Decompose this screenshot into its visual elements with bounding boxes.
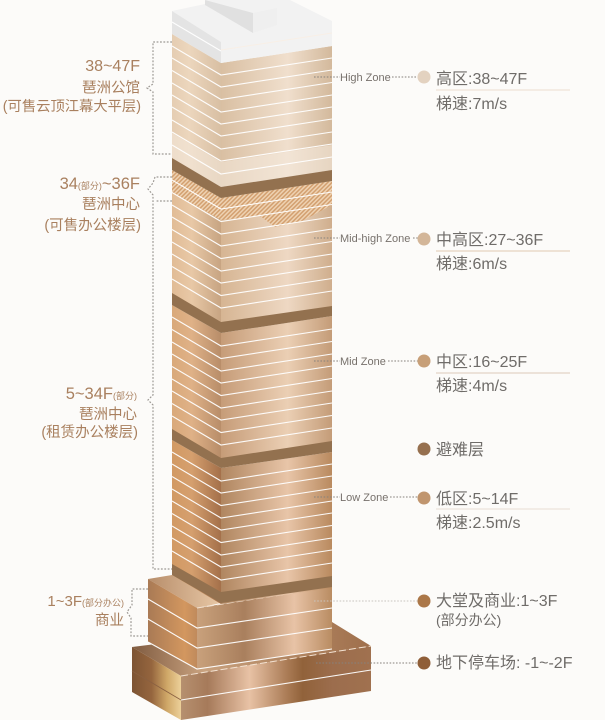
refuge floor band 4 — [172, 564, 332, 603]
low zone callout: 低区:5~14F — [436, 490, 518, 508]
hatched saleable office floors — [172, 170, 332, 227]
high zone callout: 梯速:7m/s — [436, 95, 507, 113]
high zone callout: High Zone — [340, 72, 391, 84]
mid zone callout — [314, 353, 570, 395]
high zone callout: 高区:38~47F — [436, 70, 527, 88]
refuge floor legend — [418, 441, 484, 459]
high zone callout — [314, 70, 570, 113]
parking callout: 地下停车场: -1~-2F — [436, 654, 573, 672]
left label: 5~34F: (租赁办公楼层) — [41, 424, 138, 441]
left label: 1~3F — [47, 593, 124, 629]
mid zone callout: Mid Zone — [340, 356, 386, 368]
lobby and retail callout: (部分办公) — [436, 612, 501, 628]
left label: 1~3F: 1~3F(部分办公) — [47, 593, 124, 610]
parking callout — [316, 654, 573, 672]
white crown — [172, 0, 332, 63]
mid zone callout: 中区:16~25F — [436, 353, 527, 371]
low zone callout: Low Zone — [340, 492, 388, 504]
left label: 5~34F — [41, 385, 138, 441]
building illustration — [132, 0, 371, 720]
left label: 34~36F: (可售办公楼层) — [44, 217, 141, 234]
mid zone floors — [172, 305, 332, 459]
left label: 5~34F: 琶洲中心 — [79, 406, 137, 423]
refuge floor band 3 — [172, 429, 332, 468]
refuge floor legend: 避难层 — [436, 441, 484, 459]
low zone floors — [172, 440, 332, 604]
left label: 38~47F: 38~47F — [85, 58, 140, 75]
mid-high zone callout: 梯速:6m/s — [436, 255, 507, 273]
mid-high zone callout: 中高区:27~36F — [436, 231, 543, 249]
left label: 1~3F: 商业 — [95, 612, 124, 629]
left label: 34~36F — [44, 175, 141, 234]
high zone floors — [172, 34, 332, 187]
left bracket: 1~3F — [127, 589, 148, 636]
left label: 38~47F: (可售云顶江幕大平层) — [3, 98, 141, 115]
lobby and retail callout: 大堂及商业:1~3F — [436, 592, 558, 610]
left bracket: 38~47F — [147, 42, 172, 154]
low zone callout: 梯速:2.5m/s — [436, 514, 520, 532]
mid-high zone floors — [172, 170, 332, 323]
left label: 34~36F: 琶洲中心 — [82, 196, 140, 213]
left bracket: 34~36F and 5~34F — [148, 177, 172, 569]
left label: 5~34F: 5~34F(部分) — [66, 385, 137, 403]
basement block — [132, 622, 371, 720]
mid zone callout: 梯速:4m/s — [436, 377, 507, 395]
refuge floor band 1 — [172, 158, 332, 198]
low zone callout — [314, 490, 570, 532]
left label: 38~47F: 琶洲公馆 — [82, 80, 140, 96]
left label: 34~36F: 34(部分)~36F — [60, 175, 140, 193]
lobby and retail callout — [314, 592, 558, 628]
mid-high zone callout — [314, 231, 570, 273]
mid-high zone callout: Mid-high Zone — [340, 233, 410, 245]
left label: 38~47F — [3, 58, 141, 115]
podium block — [148, 575, 332, 669]
refuge floor band 2 — [172, 293, 332, 333]
